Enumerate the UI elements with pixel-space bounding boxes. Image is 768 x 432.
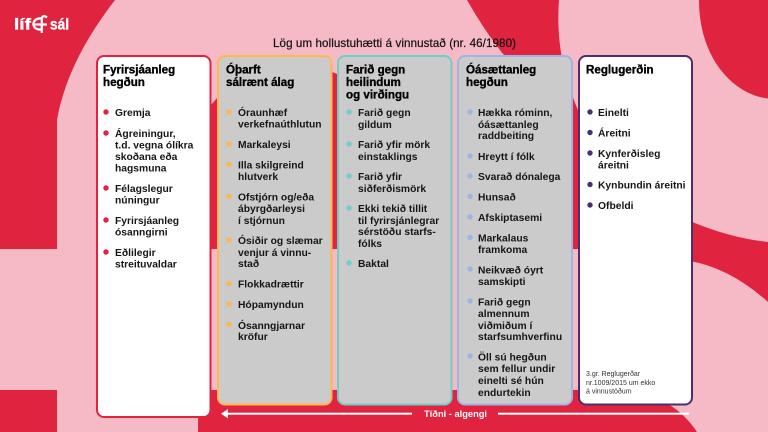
list: stað [238, 258, 259, 270]
panel: fyrirsjáanleg hegðun [97, 56, 210, 417]
list: til fyrirsjánlegrar [358, 216, 439, 227]
list: streituvaldar [115, 259, 177, 270]
list: Hunsað [478, 191, 516, 203]
list: skoðana eða [115, 151, 178, 163]
panel: farið gegn heilindum og virðingu [338, 56, 452, 404]
panel box [97, 56, 210, 417]
list: Fyrirsjáanleg [115, 216, 179, 227]
list: Illa skilgreind [238, 160, 304, 171]
list: Ósiðir og slæmar [238, 234, 323, 247]
list: kröfur [238, 332, 268, 343]
footnote: nr.1009/2015 um ekko [586, 380, 655, 387]
footnote: á vinnustöðum [586, 388, 632, 396]
list: Öll sú hegðun [478, 350, 547, 363]
list: núningur [115, 195, 160, 206]
list: Hreytt í fólk [478, 152, 535, 163]
list: Baktal [358, 259, 389, 270]
panel: óásættanleg hegðun [458, 56, 572, 404]
list: í stjórnun [238, 216, 285, 227]
list: Farið gegn [478, 296, 531, 308]
list: Óraunhæf [238, 106, 288, 119]
panel box [218, 56, 332, 404]
heading: Óþarft [226, 64, 261, 76]
list: endurtekin [478, 388, 531, 399]
logo: sál [50, 16, 69, 34]
list: Kynbundin áreitni [598, 180, 686, 191]
list: sérstöðu starfs- [358, 226, 436, 238]
heading: hegðun [466, 76, 508, 89]
list: Farið yfir mörk [358, 139, 430, 151]
list: verkefnaúthlutun [238, 119, 322, 130]
heading: Óásættanleg [466, 64, 536, 76]
list: óásættanleg [478, 120, 539, 131]
list [346, 107, 439, 270]
list: Félagslegur [115, 184, 173, 195]
heading: og virðingu [346, 88, 409, 102]
list: einelti sé hún [478, 376, 544, 387]
list: t.d. vegna ólíkra [115, 140, 194, 151]
list: Ósanngjarnar [238, 319, 305, 332]
heading: sálrænt álag [226, 76, 294, 89]
panel box [579, 56, 692, 404]
list: samskipti [478, 277, 526, 288]
list [467, 108, 562, 399]
panel box [458, 56, 572, 404]
list: hagsmuna [115, 163, 167, 174]
list: Kynferðisleg [598, 148, 660, 160]
list: starfsumhverfinu [478, 332, 562, 343]
panel: óþarft sálrænt álag [218, 56, 332, 404]
list: Eðlilegir [115, 247, 156, 259]
list: viðmiðum í [478, 320, 533, 332]
list: sem fellur undir [478, 364, 555, 375]
list: venjur á vinnu- [238, 248, 312, 259]
panel box [338, 56, 452, 404]
list: almennum [478, 309, 530, 320]
list: ósanngirni [115, 227, 168, 238]
list [587, 108, 686, 212]
heading: hegðun [103, 76, 145, 89]
logo [14, 16, 69, 34]
list: gildum [358, 120, 392, 131]
list: Neikvæð óyrt [478, 264, 544, 276]
list [103, 108, 194, 270]
list: Gremja [115, 108, 151, 119]
list: hlutverk [238, 172, 278, 183]
list [226, 106, 323, 343]
list: Áreitni [598, 126, 631, 139]
list: Ekki tekið tillit [358, 203, 428, 215]
list: framkoma [478, 245, 527, 256]
list: siðferðismörk [358, 183, 426, 195]
list: Afskiptasemi [478, 213, 542, 224]
list: einstaklings [358, 152, 418, 163]
list: Einelti [598, 108, 629, 119]
list: Farið gegn [358, 107, 411, 119]
list: Farið yfir [358, 171, 402, 183]
list: Flokkadrættir [238, 279, 304, 290]
list: Markalaus [478, 233, 529, 244]
panel: reglugerðin [579, 56, 692, 404]
list: Ofstjórn og/eða [238, 191, 314, 203]
list: Hópamyndun [238, 300, 304, 311]
heading: Farið gegn [346, 64, 405, 76]
list: Hækka róminn, [478, 108, 553, 119]
heading: Reglugerðin [586, 64, 654, 76]
footnote: 3.gr. Reglugerðar [586, 370, 641, 378]
heading: Fyrirsjáanleg [103, 64, 175, 76]
logo: líf [14, 16, 32, 34]
arrow: frequency [221, 409, 689, 419]
list: áreitni [598, 160, 629, 171]
arrow: frequency: Tíðni - algengi [424, 409, 487, 419]
list: raddbeiting [478, 131, 534, 142]
list: Svarað dónalega [478, 171, 561, 183]
list: Markaleysi [238, 140, 291, 151]
title: Lög um hollustuhætti á vinnustað (nr. 46/1980) [273, 37, 516, 50]
list: Ágreiningur, [115, 127, 176, 140]
heading: heilindum [346, 76, 401, 89]
list: fólks [358, 239, 382, 250]
list: Ofbeldi [598, 201, 634, 212]
list: ábyrgðarleysi [238, 203, 305, 215]
